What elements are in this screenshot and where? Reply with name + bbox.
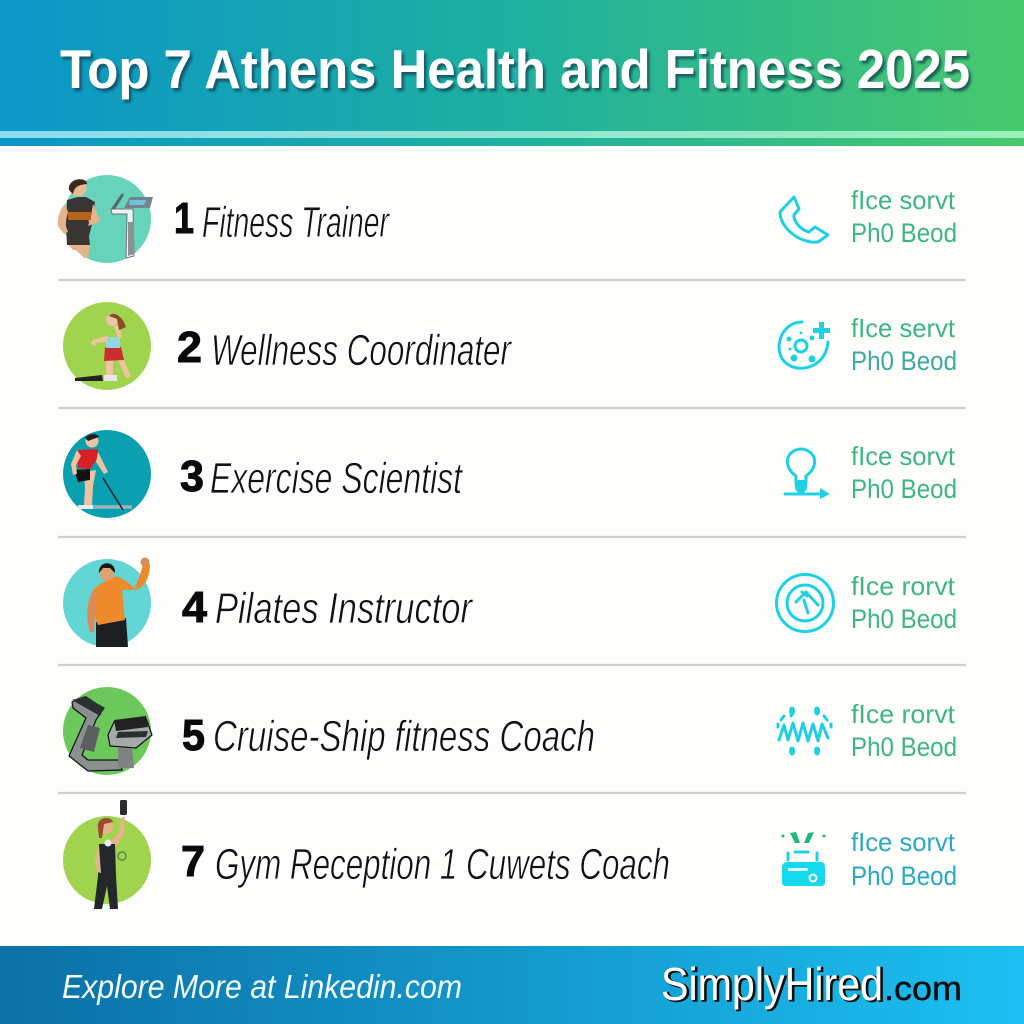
illustration: woman stretching	[63, 302, 151, 390]
row 2: Wellness Coordinator	[63, 302, 957, 390]
row 3: Exercise Scientist	[63, 430, 957, 518]
number 3: 3	[180, 452, 204, 501]
number 5: 5	[182, 711, 205, 760]
illustration: man flexing	[63, 558, 151, 647]
header banner	[0, 0, 1024, 146]
illustration: exercise machine	[63, 687, 152, 775]
contact text: Ph0 Beod	[851, 346, 957, 376]
icon: wellness circle with plus	[779, 322, 830, 368]
brand logo text: SimplyHired	[661, 958, 883, 1010]
contact text	[851, 827, 957, 891]
row 1: Fitness Trainer	[58, 175, 957, 263]
icon: bulb with arrow	[785, 449, 830, 499]
title: Top 7 Athens Health and Fitness 2025	[60, 38, 970, 100]
row 4: Pilates Instructor	[63, 558, 957, 647]
row 6: Gym Reception	[63, 800, 957, 909]
job title: Pilates Instructor	[215, 584, 474, 633]
contact text: Ph0 Beod	[851, 604, 957, 634]
icon: radio box	[782, 832, 826, 886]
icon: phone	[780, 197, 828, 242]
footer link text: Explore More at Linkedin.com	[62, 968, 462, 1005]
contact text: fIce sorvt	[851, 441, 956, 471]
contact text: Ph0 Beod	[851, 732, 957, 762]
contact text: fIce servt	[851, 313, 956, 343]
job title: Cruise-Ship fitness Coach	[213, 712, 595, 761]
brand logo text: .com	[884, 970, 962, 1008]
illustration: man on ski machine	[63, 430, 151, 518]
contact text	[851, 699, 957, 762]
contact text: Ph0 Beod	[851, 474, 957, 504]
contact text: fIce sorvt	[851, 185, 956, 215]
icon: pulse burst	[778, 708, 831, 754]
job title: Exercise Scientist	[210, 454, 463, 503]
contact text: Ph0 Beod	[851, 861, 957, 891]
number 4: 4	[182, 583, 208, 632]
job title: Wellness Coordinater	[211, 326, 513, 375]
illustration: trainer with treadmill	[58, 175, 153, 263]
number 1: 1	[174, 194, 194, 243]
contact text: fIce sorvt	[851, 827, 956, 857]
row 5: Cruise-Ship Fitness Coach	[63, 687, 957, 775]
footer banner	[0, 946, 1024, 1024]
contact text	[851, 185, 957, 248]
contact text	[851, 313, 957, 376]
contact text: fIce rorvt	[851, 571, 956, 601]
job title: Fitness Trainer	[202, 198, 391, 247]
number 7: 7	[181, 837, 205, 886]
contact text	[851, 571, 957, 634]
brand logo text: SimplyHired	[663, 959, 885, 1011]
number 2: 2	[177, 323, 202, 372]
contact text: Ph0 Beod	[851, 218, 957, 248]
icon: double circle dial	[776, 574, 834, 632]
contact text: fIce rorvt	[851, 699, 956, 729]
illustration: woman holding phone up	[63, 800, 151, 909]
job title: Gym Reception 1 Cuwets Coach	[215, 840, 670, 889]
contact text	[851, 441, 957, 504]
